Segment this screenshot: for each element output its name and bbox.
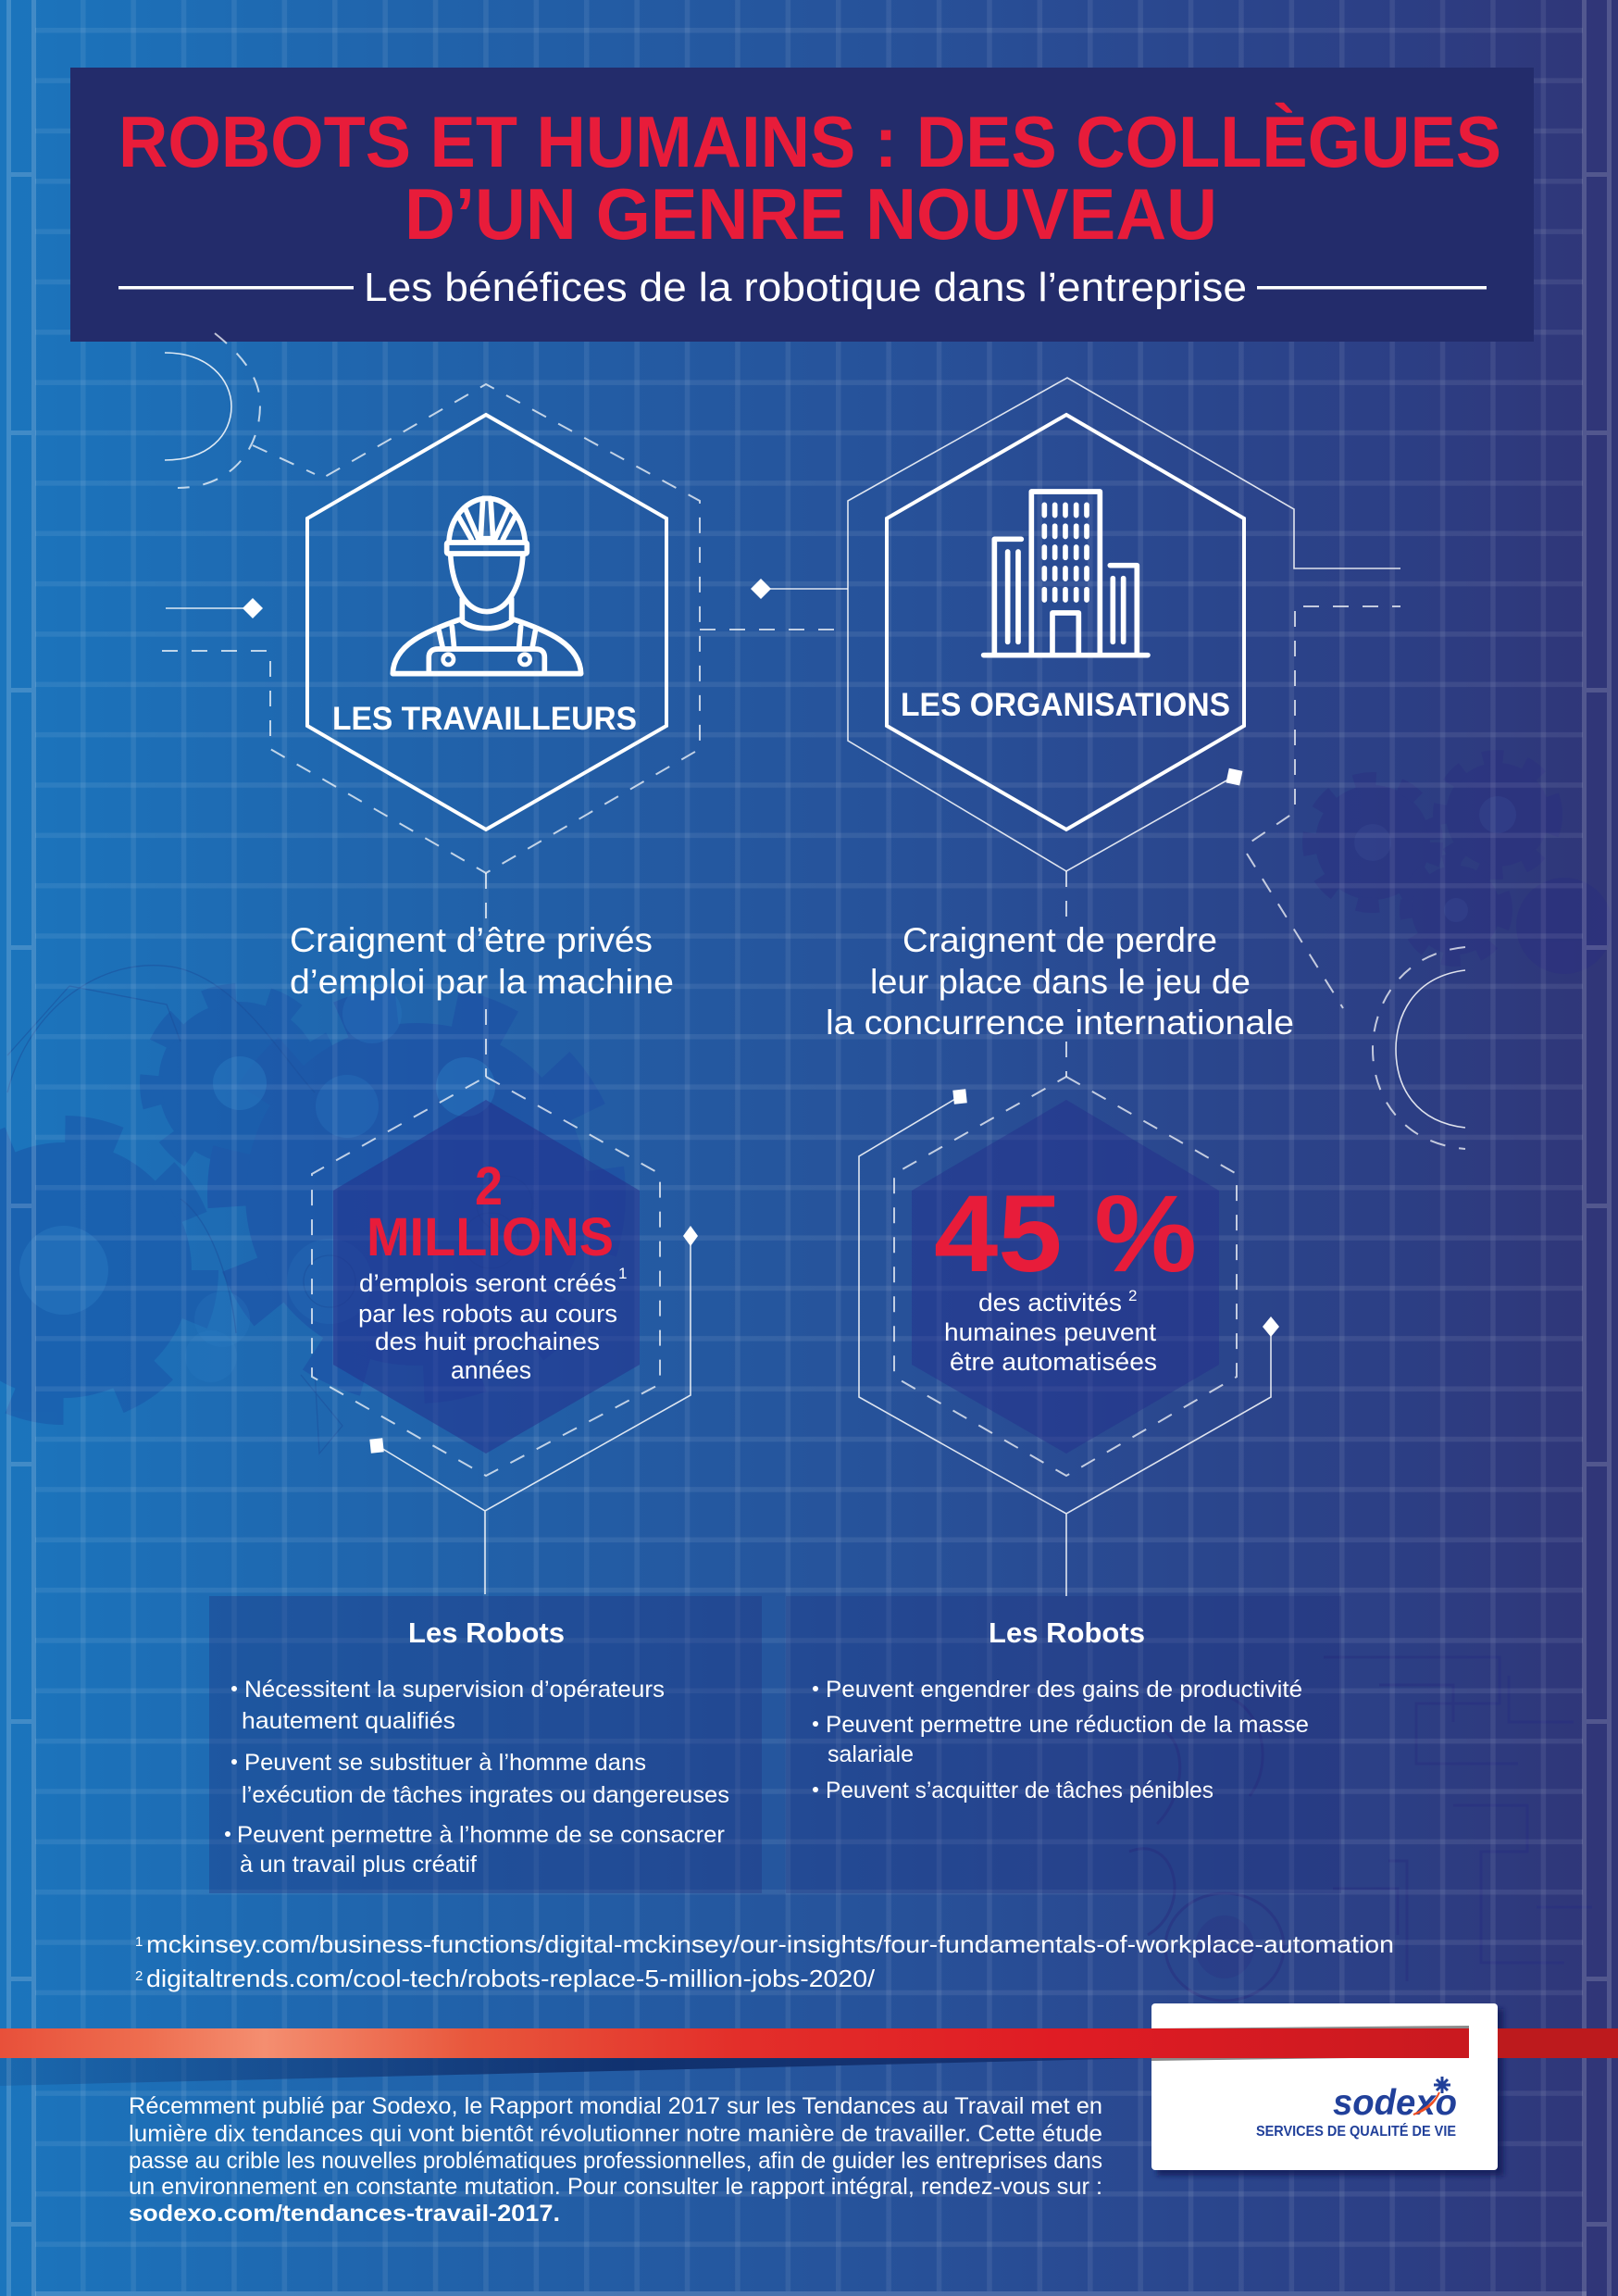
bullet 1 — [231, 1677, 665, 1734]
pointer line with diamond — [166, 598, 263, 618]
footnotes: digitaltrends.com/cool-tech/robots-replace-5-million-jobs-2020/ — [146, 1965, 876, 1992]
closing paragraph: un environnement en constante mutation. Pour consulter le rapport intégral, rendez-vous sur : — [129, 2174, 1102, 2200]
subtitle with rules — [118, 265, 1487, 310]
text: fear of workers: Craignent d’être privés — [290, 921, 653, 959]
description: des activités — [978, 1289, 1122, 1316]
description: 2 — [1128, 1287, 1137, 1304]
description: être automatisées — [950, 1348, 1157, 1376]
red band — [0, 2026, 1618, 2061]
star — [1434, 2077, 1450, 2093]
description — [944, 1287, 1157, 1376]
bullet 1: Nécessitent la supervision d’opérateurs — [244, 1677, 665, 1703]
footnotes: 1 — [135, 1934, 143, 1950]
solid hexagon — [307, 415, 666, 830]
closing paragraph — [129, 2093, 1102, 2227]
panel: les robots (organisations) — [786, 1596, 1341, 1893]
big number: 45 % — [934, 1173, 1197, 1295]
bullet 2: l’exécution de tâches ingrates ou dangereuses — [242, 1782, 729, 1808]
closing paragraph: sodexo.com/tendances-travail-2017. — [129, 2201, 560, 2227]
description: d’emplois seront créés — [359, 1269, 616, 1297]
gear sketch lines — [7, 966, 532, 1454]
panel: 2 millions statistic — [312, 1077, 698, 1594]
right gear holes — [1354, 796, 1516, 922]
text: fear of organisations: la concurrence internationale — [826, 1004, 1294, 1042]
connector: workers to statistic — [485, 873, 487, 1077]
bullet 2: Peuvent se substituer à l’homme dans — [244, 1750, 646, 1776]
wordmark: sodexo — [1333, 2083, 1457, 2123]
solid hexagon — [887, 415, 1244, 830]
title banner — [70, 68, 1534, 342]
swoosh — [1413, 2092, 1439, 2115]
background gears right — [1310, 757, 1612, 974]
background gears left — [0, 994, 606, 1409]
background technical drawing bottom right — [1129, 1657, 1592, 2001]
label: les organisations: LES ORGANISATIONS — [901, 687, 1230, 723]
bullet 3: Peuvent permettre à l’homme de se consacrer — [237, 1822, 725, 1848]
closing paragraph: Récemment publié par Sodexo, le Rapport mondial 2017 sur les Tendances au Travail met en — [129, 2093, 1102, 2119]
bullet 3: Peuvent s’acquitter de tâches pénibles — [826, 1778, 1214, 1803]
text: fear of workers: d’emploi par la machine — [290, 963, 674, 1001]
dashed hexagon — [312, 1077, 660, 1476]
callout line with markers — [859, 1089, 1279, 1596]
dashed circuit lines — [1243, 606, 1400, 1008]
bullet 3: à un travail plus créatif — [240, 1852, 477, 1878]
description: des huit prochaines — [375, 1328, 600, 1355]
square end marker — [1226, 768, 1242, 785]
bullet 3 — [225, 1822, 725, 1878]
filled hexagon — [333, 1100, 640, 1454]
dashed hexagon outline — [162, 384, 848, 873]
decorative arcs top left — [165, 333, 260, 488]
big number: 2 — [475, 1156, 503, 1217]
description: années — [451, 1356, 531, 1384]
footnotes — [135, 1930, 1394, 1992]
subtitle with rules: Les bénéfices de la robotique dans l’entreprise — [364, 265, 1247, 310]
closing paragraph: passe au crible les nouvelles problématiques professionnelles, afin de guider les entreprises dans — [129, 2148, 1102, 2174]
bullet 2 — [231, 1750, 729, 1808]
thin outer hexagon — [761, 378, 1400, 871]
icon: worker — [392, 498, 581, 674]
bullet 2: Peuvent permettre une réduction de la masse — [826, 1712, 1309, 1738]
big number: MILLIONS — [367, 1207, 614, 1267]
text: fear of organisations: leur place dans le jeu de — [870, 963, 1251, 1001]
callout line with markers — [369, 1226, 698, 1594]
panel: les robots (travailleurs) — [209, 1596, 762, 1893]
heading: Les Robots — [408, 1616, 565, 1649]
dashed hexagon — [894, 1077, 1237, 1476]
panel: 45 % statistic — [859, 1077, 1279, 1596]
gear holes — [19, 984, 495, 1382]
heading: Les Robots — [989, 1616, 1145, 1649]
bullet 2 — [813, 1712, 1309, 1767]
bullet 1: Peuvent engendrer des gains de productivité — [826, 1677, 1302, 1703]
description: par les robots au cours — [358, 1300, 617, 1328]
logo card — [1151, 2003, 1503, 2176]
text: fear of organisations: Craignent de perdre — [902, 921, 1217, 959]
description: humaines peuvent — [944, 1318, 1157, 1346]
text: fear of organisations — [826, 921, 1294, 1042]
tagline: SERVICES DE QUALITÉ DE VIE — [1256, 2122, 1456, 2140]
decorative arcs right — [1373, 947, 1465, 1149]
description — [358, 1265, 627, 1384]
bullet 2: salariale — [828, 1741, 914, 1767]
title — [118, 101, 1501, 255]
panel: les organisations — [751, 378, 1400, 1008]
label: les travailleurs: LES TRAVAILLEURS — [332, 701, 637, 737]
connector: organisations to statistic — [1065, 871, 1067, 1077]
title: ROBOTS ET HUMAINS : DES COLLÈGUES — [118, 101, 1501, 182]
description: 1 — [618, 1265, 627, 1282]
footnotes: 2 — [135, 1968, 143, 1984]
closing paragraph: lumière dix tendances qui vont bientôt révolutionner notre manière de travailler. Cette étude — [129, 2121, 1102, 2147]
footnotes: mckinsey.com/business-functions/digital-mckinsey/our-insights/four-fundamentals-of-workplace-automation — [146, 1930, 1394, 1958]
big number — [367, 1156, 614, 1267]
red band shadow — [0, 2058, 1148, 2086]
icon: buildings — [984, 492, 1148, 655]
filled hexagon — [912, 1100, 1219, 1454]
bullet 1: hautement qualifiés — [242, 1708, 455, 1734]
title: D’UN GENRE NOUVEAU — [404, 173, 1217, 255]
panel: les travailleurs — [162, 384, 848, 873]
sodexo logo — [1256, 2077, 1457, 2140]
text: fear of workers — [290, 921, 674, 1001]
connector diamond — [751, 579, 771, 599]
